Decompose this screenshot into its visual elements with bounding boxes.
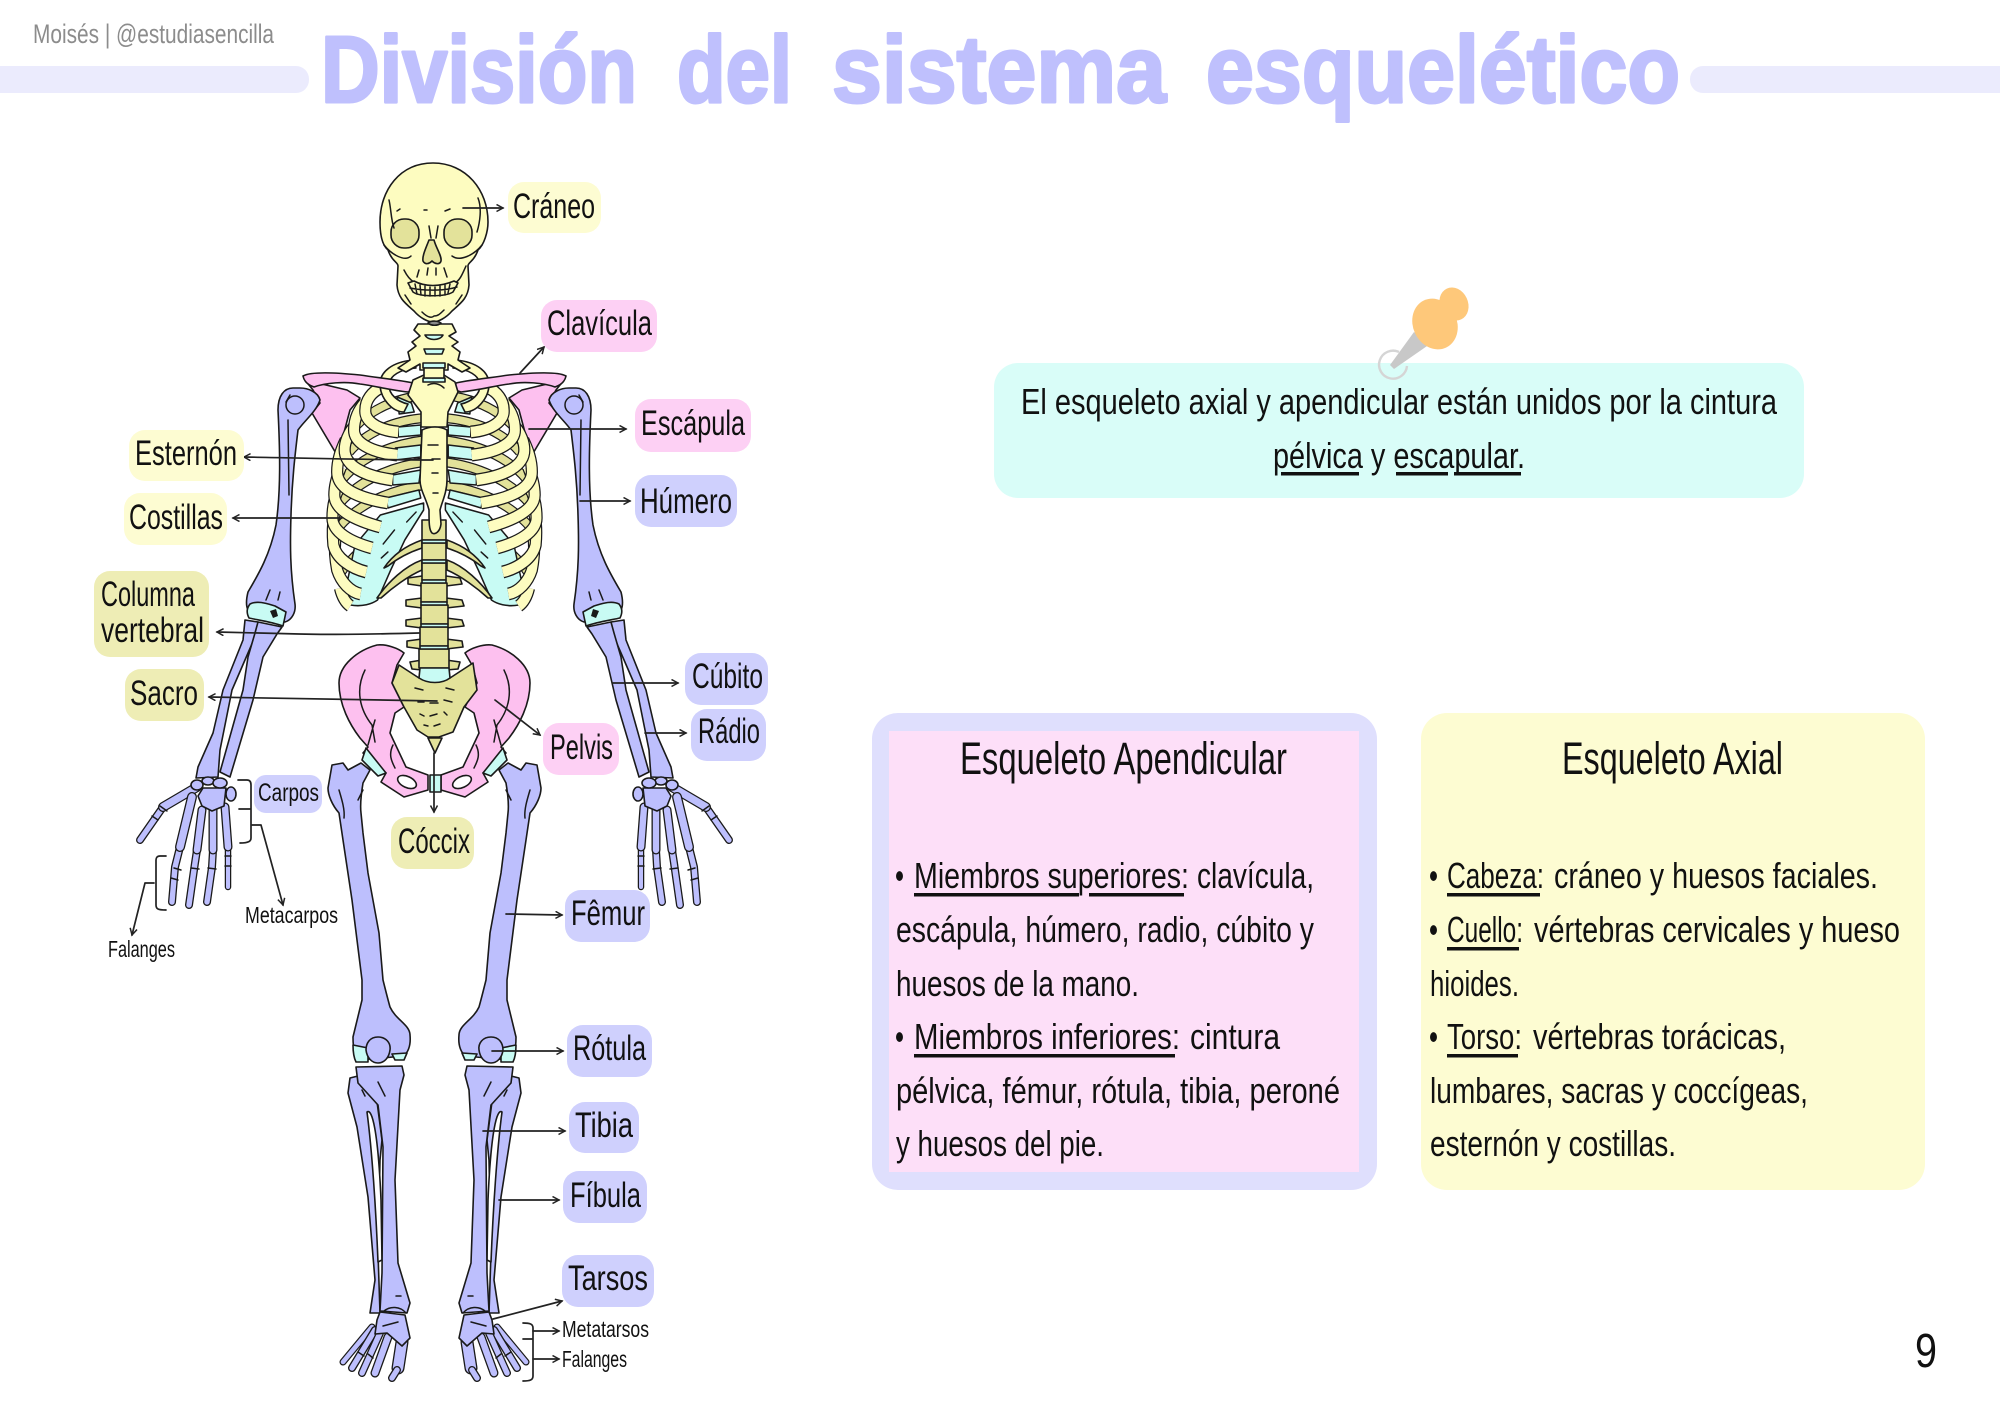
- femur: [328, 763, 410, 1060]
- sacrum: [392, 663, 477, 753]
- panel text: Miembros inferiores:: [914, 1016, 1180, 1057]
- panel text: cráneo y huesos faciales.: [1554, 855, 1878, 896]
- label: Rótula: Rótula: [573, 1029, 646, 1068]
- title: División: [321, 17, 637, 123]
- label: Escápula: Escápula: [641, 404, 745, 443]
- elbow cartilage: [247, 602, 286, 626]
- label: Rádio: Rádio: [698, 712, 760, 751]
- label: Cúbito: [685, 653, 768, 705]
- skull: [380, 163, 488, 325]
- label: Esternón: Esternón: [135, 434, 237, 473]
- label: Falanges (foot): Falanges: [562, 1346, 627, 1372]
- label: Rótula: [567, 1025, 652, 1077]
- label: Metatarsos: Metatarsos: [562, 1316, 649, 1342]
- label: Pelvis: Pelvis: [550, 728, 613, 767]
- label: Costillas: Costillas: [129, 498, 223, 537]
- ulna: [220, 622, 282, 777]
- label: Tibia: Tibia: [575, 1106, 633, 1145]
- icon: push pin: [1379, 283, 1474, 379]
- left half of skeleton: [140, 360, 428, 1378]
- panel text: lumbares, sacras y coccígeas,: [1430, 1070, 1808, 1111]
- panel text: pélvica, fémur, rótula, tibia, peroné: [896, 1070, 1340, 1111]
- spine: [406, 520, 464, 670]
- humerus: [246, 388, 320, 622]
- clavicle: [303, 373, 414, 392]
- label: Pelvis: [543, 723, 619, 775]
- label: Carpos: [254, 775, 322, 813]
- back ribs: [338, 395, 426, 592]
- callout: axial and appendicular union: El esqueleto axial y apendicular están unidos por la cintura: [1021, 381, 1778, 422]
- label: Fêmur: Fêmur: [571, 894, 645, 933]
- front ribs: [332, 388, 398, 606]
- label: Cúbito: Cúbito: [692, 657, 763, 696]
- panel text: •: [1429, 855, 1438, 896]
- panel text: [1429, 855, 1900, 1164]
- label: Costillas: [124, 493, 227, 545]
- right half of skeleton (mirrored): [441, 360, 729, 1378]
- panel text: escápula, húmero, radio, cúbito y: [896, 909, 1314, 950]
- panel: Esqueleto Apendicular: [872, 713, 1377, 1190]
- panel text: esternón y costillas.: [1430, 1123, 1676, 1164]
- patella: [366, 1037, 390, 1063]
- first rib ring: [380, 360, 416, 412]
- title: esquelético: [1206, 17, 1680, 123]
- label: Fêmur: [565, 890, 650, 942]
- header banner left: [0, 66, 309, 93]
- label: Esternón: [129, 430, 244, 481]
- title: sistema: [832, 17, 1167, 123]
- tibia: [356, 1066, 410, 1313]
- panel text: •: [1429, 1016, 1438, 1057]
- label: Húmero: [635, 475, 737, 527]
- skeleton illustration: [140, 163, 729, 1378]
- panel text: [895, 855, 1340, 1164]
- label: Columna vertebral: Columna: [101, 575, 195, 614]
- label: Metacarpos: Metacarpos: [245, 902, 338, 928]
- label: Sacro: Sacro: [130, 674, 198, 713]
- label: Tarsos: [562, 1255, 654, 1307]
- label: Rádio: [691, 709, 766, 761]
- label: Tarsos: Tarsos: [568, 1259, 648, 1298]
- label: Cráneo: Cráneo: [513, 187, 595, 226]
- label: Sacro: [125, 669, 204, 721]
- arrows and brackets: [132, 208, 686, 1381]
- label: Clavícula: [541, 300, 657, 352]
- neck vertebrae: [398, 324, 470, 382]
- slit between tibia and fibula: [367, 1112, 382, 1262]
- label: Carpos: Carpos: [258, 779, 319, 807]
- hip cartilage: [362, 748, 386, 776]
- label: Fíbula: Fíbula: [570, 1176, 641, 1215]
- callout: axial and appendicular union: pélvica y escapular.: [1273, 435, 1525, 476]
- panel text: Cuello:: [1447, 909, 1523, 950]
- panel text: hioides.: [1430, 963, 1519, 1004]
- panel text: huesos de la mano.: [896, 963, 1139, 1004]
- panel text: Torso:: [1447, 1016, 1522, 1057]
- panel text: vértebras cervicales y hueso: [1534, 909, 1900, 950]
- panel text: •: [895, 855, 904, 896]
- foot: [343, 1312, 410, 1378]
- hand: [140, 777, 236, 905]
- panel text: •: [1429, 909, 1438, 950]
- label: Falanges (hand): Falanges: [108, 936, 175, 962]
- panel text: clavícula,: [1197, 855, 1314, 896]
- header banner right: [1690, 66, 2000, 93]
- panel text: vértebras torácicas,: [1533, 1016, 1786, 1057]
- label: Cráneo: [508, 182, 601, 233]
- panel heading: Esqueleto Apendicular: [960, 733, 1287, 784]
- label: Cóccix: Cóccix: [398, 822, 470, 861]
- label: Fíbula: [563, 1171, 647, 1223]
- label: Columna vertebral: [94, 571, 209, 657]
- title: del: [677, 17, 792, 123]
- label: Tibia: [569, 1102, 639, 1153]
- author credit: Moisés | @estudiasencilla: [33, 19, 275, 49]
- panel: Esqueleto Axial: [1421, 713, 1925, 1190]
- ankle line: [362, 1082, 406, 1313]
- page number: 9: [1915, 1325, 1937, 1378]
- floating ribs: [377, 540, 422, 598]
- scapula: [305, 380, 360, 462]
- panel text: y huesos del pie.: [896, 1123, 1104, 1164]
- panel text: cintura: [1190, 1016, 1281, 1057]
- radius: [196, 620, 258, 778]
- label: Clavícula: Clavícula: [547, 304, 652, 343]
- costal cartilage: [346, 397, 424, 606]
- panel text: Miembros superiores:: [914, 855, 1189, 896]
- panel text: Cabeza:: [1447, 855, 1544, 896]
- panel heading: Esqueleto Axial: [1562, 733, 1783, 784]
- sternum: [408, 375, 458, 534]
- pubic symphysis: [430, 775, 441, 792]
- knee cartilage: [353, 1045, 407, 1062]
- ilium and pubis: [339, 645, 428, 797]
- label: Escápula: [635, 399, 751, 452]
- rib cage left: [332, 388, 426, 606]
- panel text: •: [895, 1016, 904, 1057]
- label: Cóccix: [391, 817, 474, 869]
- fibula: [348, 1076, 382, 1313]
- title: [321, 17, 1680, 123]
- label: Columna vertebral: vertebral: [101, 611, 204, 650]
- label: Húmero: Húmero: [640, 482, 732, 521]
- callout: axial and appendicular union: [994, 363, 1804, 498]
